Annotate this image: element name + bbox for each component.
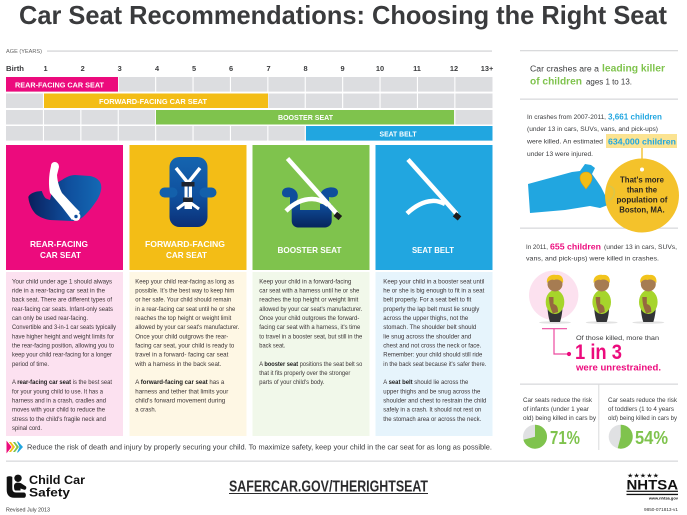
logo: NHTSA: www.nhtsa.gov	[648, 496, 679, 500]
panel: forward-facing text: Keep your child rear-facing as long as	[135, 278, 234, 285]
logo: NHTSA: NHTSA	[626, 477, 678, 492]
stat: crashes 2007-2011: 634,000 children	[608, 136, 676, 146]
panel: seat belt header	[376, 145, 492, 270]
stat: 655 children	[526, 242, 677, 263]
callout: population of Boston	[605, 148, 679, 232]
bracket connector	[542, 329, 570, 356]
panel: forward-facing text: facing car seat, your child is ready to	[135, 342, 235, 350]
panel: seat belt text: across the upper thighs, not the	[383, 315, 469, 322]
stat: crashes 2007-2011: under 13 were injured.	[527, 151, 593, 158]
icon: map pin	[580, 172, 592, 189]
icon: seat belt	[407, 160, 461, 221]
panel: seat belt text: safely in a crash. It should not rest on	[383, 407, 482, 414]
bar: seat belt	[306, 126, 492, 141]
panel: rear-facing text: harness and in a crash, cradles and	[12, 398, 106, 404]
age labels: 11	[413, 64, 421, 73]
callout: population of Boston: population of	[616, 196, 668, 204]
icon: booster seat	[282, 158, 342, 228]
bar: seat belt: SEAT BELT	[380, 131, 417, 138]
stat: 1 in 3 unrestrained: were unrestrained.	[575, 362, 661, 374]
stat: 655 children: (under 13 in cars, SUVs,	[604, 244, 677, 251]
stat: 655 children: vans, and pick-ups) were killed in crashes.	[526, 256, 659, 263]
stat: infants 71%: Car seats reduce the risk	[523, 398, 593, 404]
stat: 655 children: In 2011,	[526, 244, 548, 251]
panel: booster text: reaches the top height or weight limit	[259, 297, 359, 304]
age labels: 7	[266, 64, 271, 73]
panel: booster text: that it fits properly over the stronger	[259, 370, 351, 377]
stat: toddlers 54%: old) being killed in cars by	[608, 416, 677, 422]
panel: booster header	[252, 145, 370, 270]
stat: leading killer: ages 1 to 13.	[586, 78, 632, 86]
panel: forward-facing text: with a harness in the back seat.	[134, 361, 222, 368]
panel: rear-facing text: can only be used rear-facing.	[12, 315, 88, 322]
stat: crashes 2007-2011: (under 13 in cars, SUVs, vans, and pick-ups)	[527, 126, 658, 133]
stat: 655 children: 655 children	[550, 242, 601, 252]
panel: booster text: back seat.	[259, 342, 285, 350]
bar: booster: BOOSTER SEAT	[278, 115, 334, 122]
bar: booster	[156, 110, 454, 124]
panel: booster text: Keep your child in a forward-facing	[259, 278, 352, 285]
panel: seat belt text: the stomach area or across the neck.	[383, 416, 481, 423]
panel: forward-facing text: travel in a forward- facing car seat	[135, 352, 229, 359]
panel: seat belt text: Remember: your child should still ride	[383, 352, 483, 359]
stat: toddlers 54%: Car seats reduce the risk	[608, 398, 678, 404]
panel: forward-facing text: Once your child outgrows the rear-	[135, 333, 228, 340]
callout: population of Boston: That's more	[620, 176, 665, 184]
stat: infants 71%: old) being killed in cars by	[523, 416, 596, 422]
stat: crashes 2007-2011	[526, 112, 677, 158]
panel: rear-facing text: period of time.	[12, 361, 49, 368]
panel: forward-facing text: child's forward movement during	[135, 398, 226, 404]
figure: child 3	[632, 275, 664, 324]
age labels: 5	[192, 64, 196, 73]
stat: toddlers 54%: of toddlers (1 to 4 years	[608, 407, 674, 413]
panel: rear-facing text: for your young child to use. It has a	[12, 388, 103, 395]
stat: 1 in 3 unrestrained	[575, 335, 661, 374]
panel: forward-facing header: CAR SEAT	[166, 250, 208, 260]
map: Massachusetts	[528, 164, 608, 213]
right column: dividers	[520, 50, 678, 450]
panel: rear-facing header	[6, 145, 123, 270]
stat: leading killer	[530, 62, 665, 88]
panel: forward-facing text: in a rear-facing car seat until he or she	[135, 306, 236, 313]
bar: rear-facing	[6, 77, 118, 92]
bar: rear-facing: REAR-FACING CAR SEAT	[15, 83, 105, 90]
panel: forward-facing text: harness and tether that limits your	[135, 388, 229, 395]
panel: seat belt text: Keep your child in a booster seat until	[383, 278, 484, 285]
panel: seat belt text: upper thighs and be snug across the	[383, 388, 481, 395]
stat: crashes 2007-2011: 3,661 children	[608, 112, 662, 122]
stat: leading killer: leading killer	[602, 62, 665, 74]
stat: toddlers 54%	[608, 398, 678, 449]
panel: seat belt text: belt properly. For a seat belt to fit	[383, 297, 472, 304]
figure: child 1	[539, 275, 571, 324]
panel: booster text: car seat with a harness until he or she	[259, 288, 360, 294]
panel: booster text	[252, 272, 370, 436]
age labels: 3	[118, 64, 122, 73]
website link: SAFERCAR.GOV/THERIGHTSEAT	[229, 478, 428, 496]
logo: NHTSA: ★★★★★	[627, 472, 659, 480]
figure: child 2	[586, 275, 618, 324]
title: Car Seat Recommendations: Choosing the Right Seat	[19, 0, 667, 30]
stat: crashes 2007-2011: In crashes from 2007-2011,	[527, 114, 606, 121]
age labels: 4	[155, 64, 160, 73]
panel: booster text: parts of your child's body.	[259, 379, 324, 386]
bar: forward-facing: FORWARD-FACING CAR SEAT	[99, 99, 208, 106]
panel: rear-facing text: ride in a rear-facing car seat in the	[12, 288, 105, 294]
highlight circle	[529, 271, 578, 320]
logo: Child Car Safety: Safety	[29, 488, 71, 500]
panel: seat belt text	[376, 272, 492, 436]
panel: seat belt text: shoulder and chest to restrain the child	[383, 398, 487, 404]
panel: rear-facing text: Your child under age 1 should always	[12, 278, 112, 285]
panel: booster text: to travel in a booster seat, but still in the	[259, 333, 363, 340]
age labels: 10	[376, 64, 384, 73]
logo: NHTSA	[626, 472, 679, 500]
document number: 9850-071813-v1	[644, 507, 678, 513]
panel: forward-facing text: A forward-facing car seat has a	[135, 379, 225, 386]
panel: rear-facing text	[6, 272, 123, 436]
age labels: Birth	[6, 64, 24, 73]
age labels: 12	[450, 64, 458, 73]
panel: forward-facing header	[130, 145, 246, 270]
panel: rear-facing text: moves with your child to reduce the	[12, 407, 105, 414]
safety note: Reduce the risk of death and injury by properly securing your child. To maximize safety, keep your child in the car seat for as long as possible.	[27, 444, 492, 452]
label: BOOSTER SEAT	[278, 245, 342, 255]
panel: rear-facing text: A rear-facing car seat is the best seat	[12, 379, 112, 386]
panel: booster text: facing car seat with a harness, it's time	[259, 324, 361, 331]
panel: forward-facing text: reaches the top height or weight limit	[135, 315, 231, 322]
pie chart 54%	[609, 425, 633, 449]
panel: seat belt text: lie snug across the shoulder and	[383, 333, 472, 340]
panel: rear-facing text: the rear-facing position, allowing you to	[12, 342, 114, 350]
stat: leading killer: Car crashes are a	[530, 64, 600, 74]
icon: colored arrows	[7, 442, 23, 452]
label: REAR-FACING	[30, 239, 88, 249]
panel: booster text: A booster seat positions the seat belt so	[259, 361, 363, 368]
stat: 1 in 3 unrestrained: Of those killed, more than	[576, 335, 659, 342]
panel: forward-facing text: a crash.	[135, 407, 157, 414]
stat: infants 71%	[523, 398, 596, 449]
panel: rear-facing text: have higher height and weight limits for	[12, 333, 115, 340]
callout: population of Boston: Boston, MA.	[619, 206, 665, 214]
age labels	[6, 64, 494, 73]
panel: rear-facing text: spinal cord.	[12, 425, 42, 432]
panel: booster text: Once your child outgrows the forward-	[259, 315, 359, 322]
revised date: Revised July 2013	[6, 508, 50, 514]
icon: rear-facing seat	[28, 162, 101, 221]
stat: toddlers 54%: 54%	[635, 428, 668, 448]
age labels: 13+	[481, 64, 494, 73]
panel: booster text: allowed by your car seat's manufacturer.	[259, 306, 362, 313]
panel: rear-facing text: stress to the child's fragile neck and	[12, 416, 106, 423]
callout: population of Boston: than the	[627, 186, 658, 194]
stat: infants 71%: of infants (under 1 year	[523, 407, 589, 413]
panel: seat belt text: he or she is big enough to fit in a seat	[383, 288, 485, 294]
panel: forward-facing text: possible. It's the best way to keep him	[135, 288, 234, 294]
age labels: 9	[340, 64, 345, 73]
timeline chart	[6, 49, 494, 141]
panel: forward-facing text	[130, 272, 246, 436]
age labels: 1	[43, 64, 48, 73]
panel: seat belt text: in the back seat because it's safer there.	[383, 361, 487, 368]
label: SEAT BELT	[412, 245, 455, 255]
axis label: AGE (YEARS)	[6, 49, 42, 55]
panel: rear-facing text: Convertible and 3-in-1 car seats typically	[12, 324, 117, 331]
panel: rear-facing text: keep your child rear-facing for a longer	[12, 352, 113, 359]
label: FORWARD-FACING	[145, 239, 225, 249]
icon: forward-facing seat	[160, 157, 216, 227]
logo: Child Car Safety	[7, 475, 86, 500]
stat: 1 in 3 unrestrained: 1 in 3	[575, 341, 622, 364]
panel: rear-facing text: back seat. There are different types of	[12, 297, 112, 304]
panel: seat belt text: stomach. The shoulder belt should	[383, 324, 477, 331]
grid cells	[6, 77, 492, 141]
bar: forward-facing	[44, 94, 268, 108]
stat: infants 71%: 71%	[550, 428, 580, 448]
panel: seat belt text: chest and not cross the neck or face.	[383, 342, 481, 350]
age labels: 6	[229, 64, 233, 73]
stat: crashes 2007-2011: were killed. An estimated	[526, 138, 603, 146]
panel: rear-facing text: rear-facing car seats. Infant-only seats	[12, 306, 113, 313]
logo: Child Car Safety: Child Car	[29, 475, 86, 487]
panel: forward-facing text: or her safe. Your child should remain	[135, 297, 232, 304]
panel: seat belt text: properly the lap belt must lie snugly	[383, 306, 480, 313]
stat: leading killer: of children	[530, 76, 582, 88]
panel: rear-facing header: CAR SEAT	[40, 250, 82, 260]
panel: seat belt text: A seat belt should lie across the	[383, 379, 469, 386]
pie chart 71%	[523, 425, 547, 449]
panel: forward-facing text: allowed by your car seat's manufacturer.	[135, 324, 239, 331]
age labels: 2	[81, 64, 85, 73]
age labels: 8	[303, 64, 308, 73]
